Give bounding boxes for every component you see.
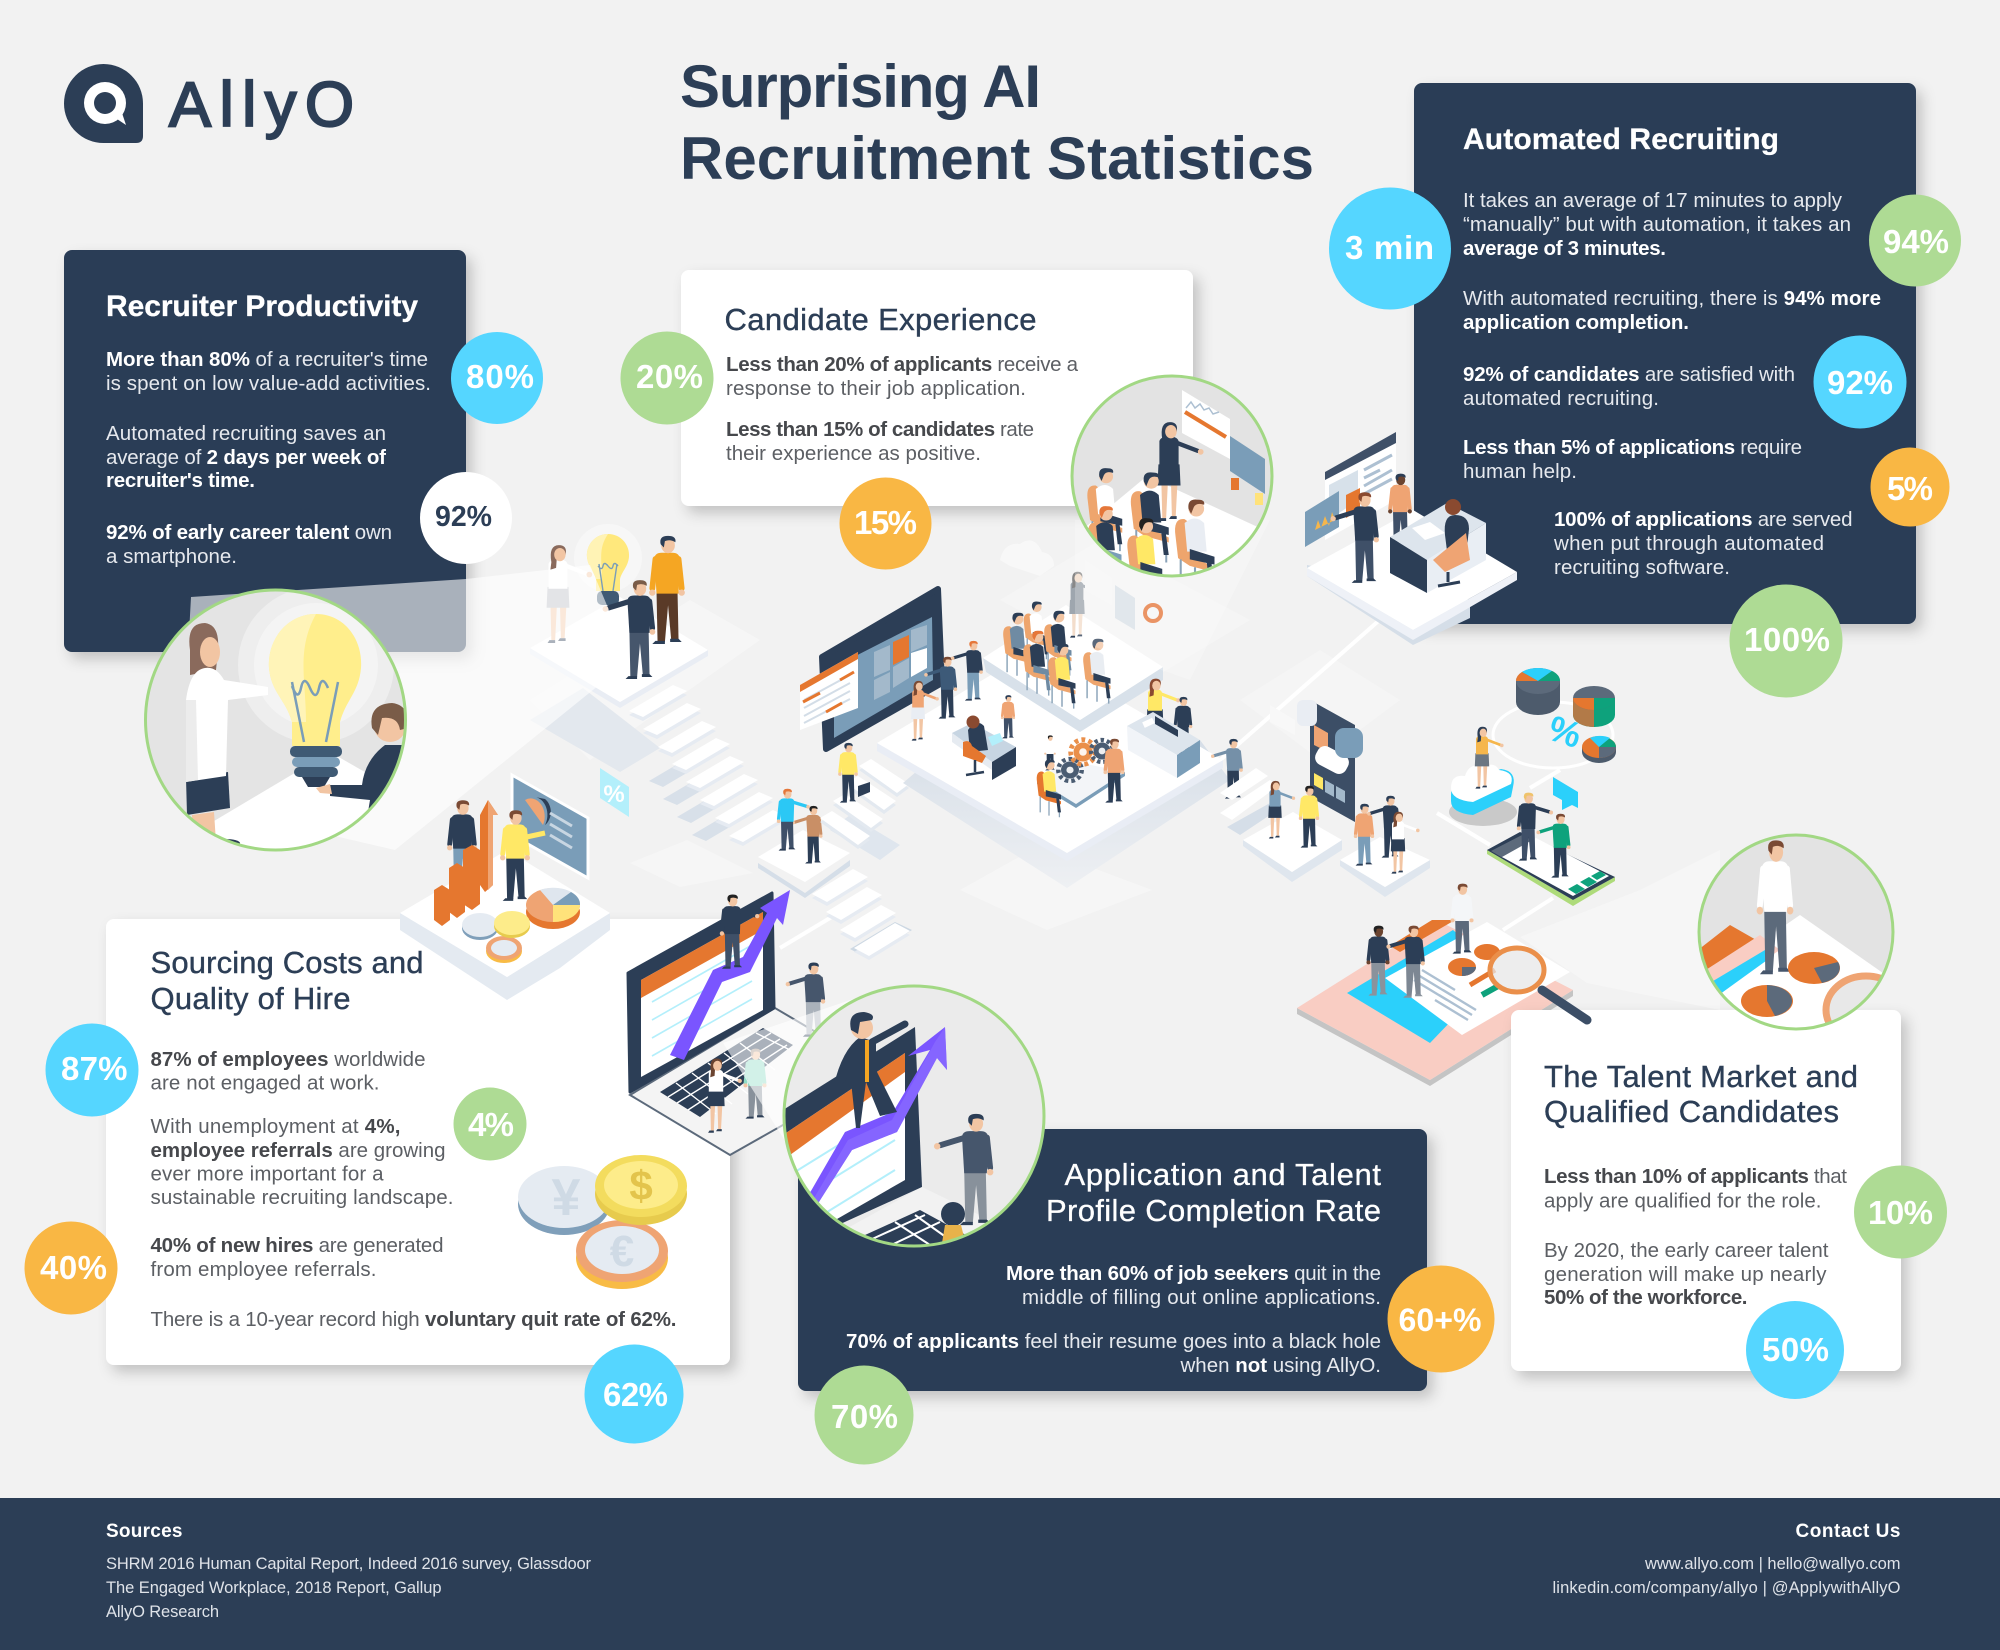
stat: 100% — [1730, 584, 1842, 698]
text block: sourcing facts: 87% of employees worldwide — [150, 1048, 426, 1071]
stat: 94%: 94% — [1883, 223, 1949, 260]
contact: Contact Us — [1796, 1521, 1900, 1542]
stat: 3 min: 3 min — [1345, 229, 1434, 266]
stat: 4% — [454, 1088, 526, 1160]
footer — [0, 1498, 2000, 1650]
text block: candidate facts: Less than 15% of candidates rate — [726, 418, 1034, 441]
upper classroom platform — [983, 560, 1163, 732]
title — [680, 53, 1314, 192]
icon: coins — [518, 1155, 687, 1289]
illustration: right stairs — [1220, 768, 1278, 835]
heading: recruiter productivity: Recruiter Productivity — [106, 290, 418, 323]
stat: 92% smartphone — [420, 472, 512, 564]
text block: sourcing facts: employee referrals are growing — [150, 1139, 446, 1162]
sources — [106, 1521, 592, 1621]
illustration: cloud and data pies: % — [1544, 707, 1587, 756]
text block: sourcing facts: from employee referrals. — [150, 1258, 376, 1281]
beam: laptop highlight — [723, 990, 880, 1165]
stat: 40% — [24, 1222, 118, 1314]
panel: candidate experience — [681, 270, 1193, 506]
beam: lightbulb highlight — [180, 565, 630, 850]
stat: 87% — [46, 1024, 138, 1116]
illustration: stairs to main platform — [820, 743, 909, 860]
panel: sourcing costs and quality of hire — [106, 919, 730, 1365]
text block: sourcing facts: ever more important for a — [150, 1162, 384, 1186]
stat: 80%: 80% — [466, 358, 534, 395]
text block: talent facts: Less than 10% of applicants that — [1544, 1165, 1847, 1188]
zoom circle: classroom — [1070, 374, 1274, 578]
icon: coins: $ — [629, 1162, 653, 1209]
illustration: handshake platform — [758, 789, 850, 898]
heading: sourcing costs: Quality of Hire — [150, 981, 350, 1016]
zoom circle: lightbulb — [140, 585, 410, 860]
logo: AllyO — [169, 70, 354, 140]
text block: automated recruiting facts: application completion. — [1463, 311, 1689, 334]
stat: 40%: 40% — [40, 1249, 107, 1286]
text block: automated recruiting facts: human help. — [1463, 460, 1577, 483]
text block: recruiter facts: 92% of early career talent own — [106, 521, 392, 544]
text block: recruiter facts: average of 2 days per week of — [106, 446, 386, 469]
heading: talent market: Qualified Candidates — [1544, 1094, 1839, 1129]
title: Recruitment Statistics — [680, 125, 1314, 192]
stat: 50%: 50% — [1762, 1331, 1829, 1368]
heading: sourcing costs: Sourcing Costs and — [150, 945, 424, 980]
stat: 4%: 4% — [468, 1106, 514, 1143]
stat: 92% satisfied — [1814, 336, 1906, 428]
text block: automated recruiting facts — [1463, 189, 1881, 579]
logo — [64, 64, 354, 143]
illustration: lower stairs — [812, 869, 912, 960]
stat: 87%: 87% — [61, 1050, 128, 1087]
stat: 20% — [620, 332, 714, 424]
text block: automated recruiting facts: Less than 5% of applications require — [1463, 436, 1802, 459]
screen: big monitor — [800, 589, 942, 749]
stat: 80% — [451, 332, 543, 424]
text block: application facts: More than 60% of job seekers quit in the — [1006, 1262, 1381, 1285]
beam: classroom highlight — [1075, 520, 1270, 680]
text block: recruiter facts: Automated recruiting saves an — [106, 422, 386, 445]
panel: application and talent profile completion rate — [798, 1129, 1427, 1391]
text block: recruiter facts: recruiter's time. — [106, 469, 255, 492]
zoom circle: thinking candidate — [1698, 834, 1894, 1030]
illustration: stairs from lightbulb to handshake — [629, 685, 787, 846]
stat: 92% smartphone: 92% — [435, 501, 492, 533]
text block: automated recruiting facts: It takes an average of 17 minutes to apply — [1463, 189, 1843, 212]
heading: application completion: Application and Talent — [1064, 1157, 1381, 1192]
text block: talent facts: generation will make up nearly — [1544, 1263, 1827, 1286]
zoom circle: growth arrow — [780, 984, 1050, 1250]
sources: Sources — [106, 1521, 182, 1542]
illustration: pink document board — [1297, 920, 1573, 1086]
text block: recruiter facts: More than 80% of a recruiter's time — [106, 348, 428, 371]
stat: 92% satisfied: 92% — [1827, 364, 1893, 401]
heading: application completion: Profile Completion Rate — [1046, 1193, 1381, 1228]
illustration: phone app platforms — [1243, 700, 1430, 897]
stat: 10%: 10% — [1868, 1194, 1933, 1231]
text block: automated recruiting facts: With automated recruiting, there is 94% more — [1463, 287, 1881, 310]
stat: 20%: 20% — [636, 358, 703, 395]
text block: recruiter facts: a smartphone. — [106, 545, 237, 568]
stat: 15% — [840, 478, 932, 570]
illustration: laptop with growth arrow — [628, 890, 880, 1155]
text block: sourcing facts: sustainable recruiting landscape. — [150, 1186, 454, 1209]
text block: candidate facts: response to their job application. — [726, 377, 1026, 400]
illustration: sourcing platform with charts: % — [603, 781, 625, 808]
heading: automated recruiting: Automated Recruiting — [1463, 123, 1779, 156]
floor: faint isometric tiles and connecting lines — [530, 540, 1560, 948]
illustration: automated recruiting platform — [1305, 432, 1517, 645]
text block: sourcing facts: There is a 10-year record high voluntary quit rate of 62%. — [150, 1308, 676, 1331]
stat: 94% — [1869, 194, 1961, 286]
illustration: main office platform — [800, 560, 1243, 888]
text block: talent facts: apply are qualified for the role. — [1544, 1190, 1822, 1212]
contact — [1552, 1521, 1901, 1597]
desk with seated worker — [952, 695, 1016, 780]
title: Surprising AI — [680, 53, 1041, 120]
sources: The Engaged Workplace, 2018 Report, Gallup — [106, 1579, 442, 1597]
text block: sourcing facts: With unemployment at 4%, — [150, 1115, 400, 1138]
contact: linkedin.com/company/allyo | @ApplywithAllyO — [1552, 1579, 1901, 1597]
illustration: lightbulb platform scene — [530, 524, 708, 708]
text block: recruiter facts — [106, 348, 431, 568]
text block: sourcing facts: are not engaged at work. — [150, 1072, 380, 1094]
panel: automated recruiting — [1414, 83, 1916, 624]
text block: automated recruiting facts: average of 3 minutes. — [1463, 237, 1666, 260]
illustration: smartphone with two people — [1487, 777, 1615, 906]
illustration: cloud and data pies — [1449, 668, 1616, 826]
text block: application facts: when not using AllyO. — [1180, 1354, 1381, 1377]
text block: automated recruiting facts: recruiting software. — [1554, 556, 1730, 579]
sources: SHRM 2016 Human Capital Report, Indeed 2016 survey, Glassdoor — [106, 1555, 592, 1573]
heading: candidate experience: Candidate Experience — [724, 302, 1036, 337]
heading: application completion — [1046, 1157, 1381, 1228]
stat: 62% — [584, 1344, 684, 1444]
stat: 10% — [1854, 1166, 1947, 1258]
icon: coins: ¥ — [552, 1169, 581, 1227]
stat: 70% — [814, 1366, 914, 1464]
stat: 70%: 70% — [831, 1398, 898, 1435]
stat: 60+%: 60+% — [1398, 1302, 1482, 1338]
stat: 15%: 15% — [854, 504, 917, 541]
sources: AllyO Research — [106, 1603, 219, 1621]
beam: talent highlight — [1520, 850, 1720, 1010]
panel: recruiter productivity — [64, 250, 466, 652]
text block: application facts: 70% of applicants feel their resume goes into a black hole — [846, 1330, 1381, 1353]
text block: application facts — [846, 1262, 1381, 1377]
text block: sourcing facts: 40% of new hires are generated — [150, 1234, 444, 1257]
reception desk — [1127, 679, 1200, 778]
text block: talent facts — [1544, 1165, 1847, 1309]
text block: automated recruiting facts: “manually” but with automation, it takes an — [1463, 213, 1851, 236]
stat: 62%: 62% — [603, 1376, 668, 1413]
text block: recruiter facts: is spent on low value-add activities. — [106, 372, 431, 395]
heading: sourcing costs — [150, 945, 424, 1016]
stat: 5%: 5% — [1887, 470, 1933, 507]
text block: talent facts: By 2020, the early career talent — [1544, 1239, 1829, 1262]
stat: 50% — [1746, 1301, 1844, 1399]
stat: 5% — [1870, 448, 1950, 526]
illustration: document with magnifier and candidates — [1347, 884, 1587, 1043]
heading: talent market — [1544, 1059, 1858, 1129]
text block: candidate facts: Less than 20% of applicants receive a — [726, 353, 1079, 376]
text block: application facts: middle of filling out online applications. — [1022, 1286, 1381, 1309]
text block: automated recruiting facts: 92% of candidates are satisfied with — [1463, 363, 1795, 386]
stat: 60+% — [1388, 1266, 1494, 1372]
text block: talent facts: 50% of the workforce. — [1544, 1286, 1748, 1309]
heading: talent market: The Talent Market and — [1544, 1059, 1858, 1094]
stat: 100%: 100% — [1744, 621, 1830, 658]
text block: candidate facts — [726, 353, 1079, 465]
contact: www.allyo.com | hello@wallyo.com — [1644, 1555, 1900, 1573]
panel: the talent market and qualified candidates — [1511, 1010, 1901, 1371]
text block: candidate facts: their experience as positive. — [726, 442, 981, 465]
text block: sourcing facts — [150, 1048, 676, 1331]
gears table — [1037, 735, 1125, 817]
text block: automated recruiting facts: automated recruiting. — [1463, 387, 1659, 410]
icon: coins: € — [610, 1227, 634, 1276]
illustration: sourcing platform with charts — [400, 768, 629, 1000]
text block: automated recruiting facts: when put through automated — [1553, 532, 1824, 555]
text block: automated recruiting facts: 100% of applications are served — [1554, 508, 1852, 531]
stat: 3 min — [1329, 188, 1451, 310]
